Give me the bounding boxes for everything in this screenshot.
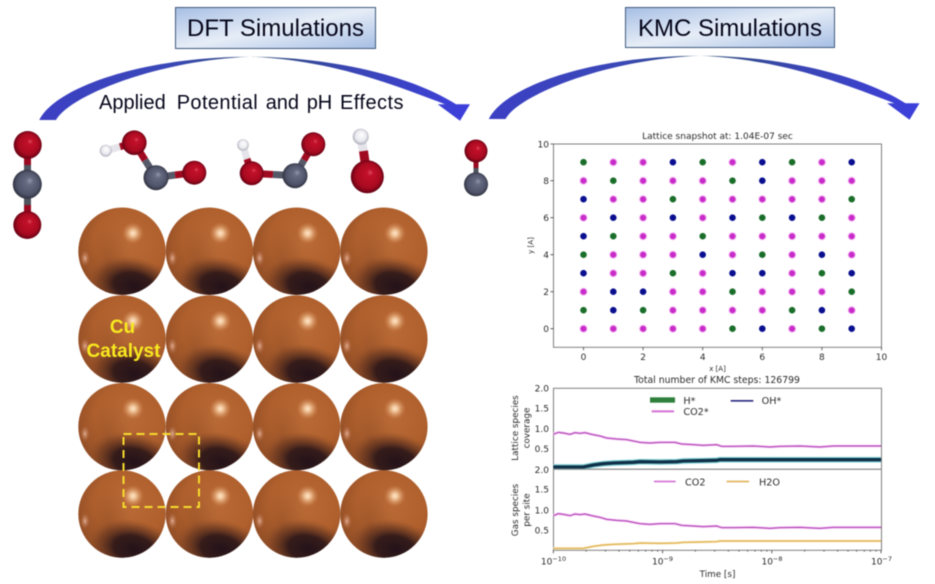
- legend: H2O: H2O: [759, 477, 780, 488]
- molecule: OH: [351, 129, 384, 193]
- chart: gas species per site: [511, 469, 892, 580]
- molecule: CO: [464, 140, 488, 196]
- title: KMC Simulations: [626, 8, 834, 48]
- y tick labels: 2: [543, 288, 549, 298]
- y tick labels: 0.5: [535, 445, 549, 455]
- y tick labels: 0.5: [535, 526, 549, 536]
- x tick labels: 8: [819, 353, 825, 363]
- arrow: KMC curved arrow: [489, 56, 920, 120]
- y tick labels: 10: [538, 140, 549, 150]
- legend: CO2: [654, 477, 705, 488]
- plot frame: [554, 388, 882, 469]
- x tick labels: 10: [652, 558, 663, 568]
- molecule: HOCO bent right: [237, 132, 325, 188]
- curve: dark core: [553, 460, 881, 467]
- title: KMC Simulations: KMC Simulations: [638, 15, 822, 42]
- legend: OH*: OH*: [762, 396, 782, 407]
- chart: lattice snapshot: [527, 132, 887, 373]
- y tick labels: 1.5: [535, 486, 549, 496]
- molecule: HOCO bent left: [100, 130, 206, 190]
- curve: CO2*: [553, 432, 881, 447]
- y axis label: y [A]: [527, 237, 535, 254]
- x axis label: Time [s]: [699, 570, 735, 580]
- y tick labels: [538, 140, 549, 335]
- y axis label: Lattice species: [511, 395, 521, 461]
- label: Cu Catalyst: Cu: [110, 317, 135, 338]
- x tick labels: 10: [871, 558, 882, 568]
- x tick labels: −8: [773, 555, 783, 563]
- molecule: CO2: [13, 131, 42, 239]
- blue sites: OH*: [584, 162, 852, 329]
- highlight: dashed unit cell square: [124, 434, 199, 507]
- legend: OH*: [731, 396, 782, 407]
- title: DFT Simulations: DFT Simulations: [187, 15, 364, 42]
- y tick labels: [535, 384, 549, 476]
- curve: CO2 halo: [553, 514, 881, 528]
- axis ticks: [550, 144, 882, 350]
- x tick labels: 6: [759, 353, 765, 363]
- x tick labels: −7: [882, 555, 892, 563]
- heading: applied potential and pH effects: Applied: [99, 92, 166, 114]
- text: total number of KMC steps: Total number of KMC steps: 126799: [633, 375, 800, 386]
- heading: applied potential and pH effects: Effects: [340, 92, 404, 114]
- x tick labels: 10: [876, 353, 887, 363]
- x axis label: x [A]: [709, 365, 726, 373]
- y tick labels: 8: [543, 177, 549, 187]
- chart: lattice species coverage: [511, 384, 882, 476]
- y tick labels: 1.5: [535, 404, 549, 414]
- x tick labels: 10: [541, 558, 552, 568]
- legend: H*: [650, 396, 696, 407]
- y tick labels: 2.0: [535, 466, 549, 476]
- green sites: H*: [584, 162, 852, 329]
- y axis label: per site: [522, 493, 532, 527]
- x tick labels: [541, 555, 892, 568]
- y axis label: Gas species: [511, 483, 521, 536]
- legend: CO2: CO2: [685, 477, 705, 488]
- curve: H2O halo: [553, 541, 881, 548]
- y tick labels: 4: [543, 251, 549, 261]
- legend: H2O: [727, 477, 780, 488]
- magenta sites: CO2*: [584, 162, 852, 329]
- y tick labels: 2.0: [535, 384, 549, 394]
- curve: CO2: [553, 514, 881, 528]
- x tick labels: 2: [640, 353, 646, 363]
- chart title: Lattice snapshot at: 1.04E-07 sec: [642, 132, 793, 142]
- axis ticks: [553, 550, 881, 553]
- y tick labels: 1.0: [535, 506, 549, 516]
- x tick labels: [581, 353, 887, 363]
- x tick labels: −10: [552, 555, 566, 563]
- label: Cu Catalyst: Catalyst: [87, 341, 161, 362]
- x tick labels: 10: [761, 558, 773, 568]
- plot frame: [554, 469, 882, 550]
- y tick labels: 1.0: [535, 425, 549, 435]
- legend: CO2*: CO2*: [683, 407, 709, 418]
- legend: CO2*: [652, 407, 709, 418]
- heading: applied potential and pH effects: and: [266, 92, 299, 114]
- y tick labels: 0: [543, 325, 549, 335]
- plot frame: [554, 144, 882, 347]
- y tick labels: 6: [543, 214, 549, 224]
- heading: applied potential and pH effects: pH: [307, 92, 332, 114]
- title: DFT Simulations: [176, 8, 376, 48]
- arrow: DFT curved arrow: [39, 57, 470, 121]
- curve: H* and OH*: [553, 460, 881, 467]
- magenta site centers: [584, 162, 852, 329]
- curve: H2O: [553, 541, 881, 548]
- x tick labels: 0: [581, 353, 587, 363]
- curve: CO2* halo: [553, 432, 881, 447]
- y axis label: coverage: [522, 408, 532, 448]
- x tick labels: 4: [700, 353, 706, 363]
- heading: applied potential and pH effects: Potential: [177, 92, 258, 114]
- x tick labels: −9: [663, 555, 673, 563]
- y tick labels: [535, 486, 549, 536]
- panel: Cu catalyst surface: [78, 207, 448, 584]
- legend: H*: H*: [683, 396, 696, 407]
